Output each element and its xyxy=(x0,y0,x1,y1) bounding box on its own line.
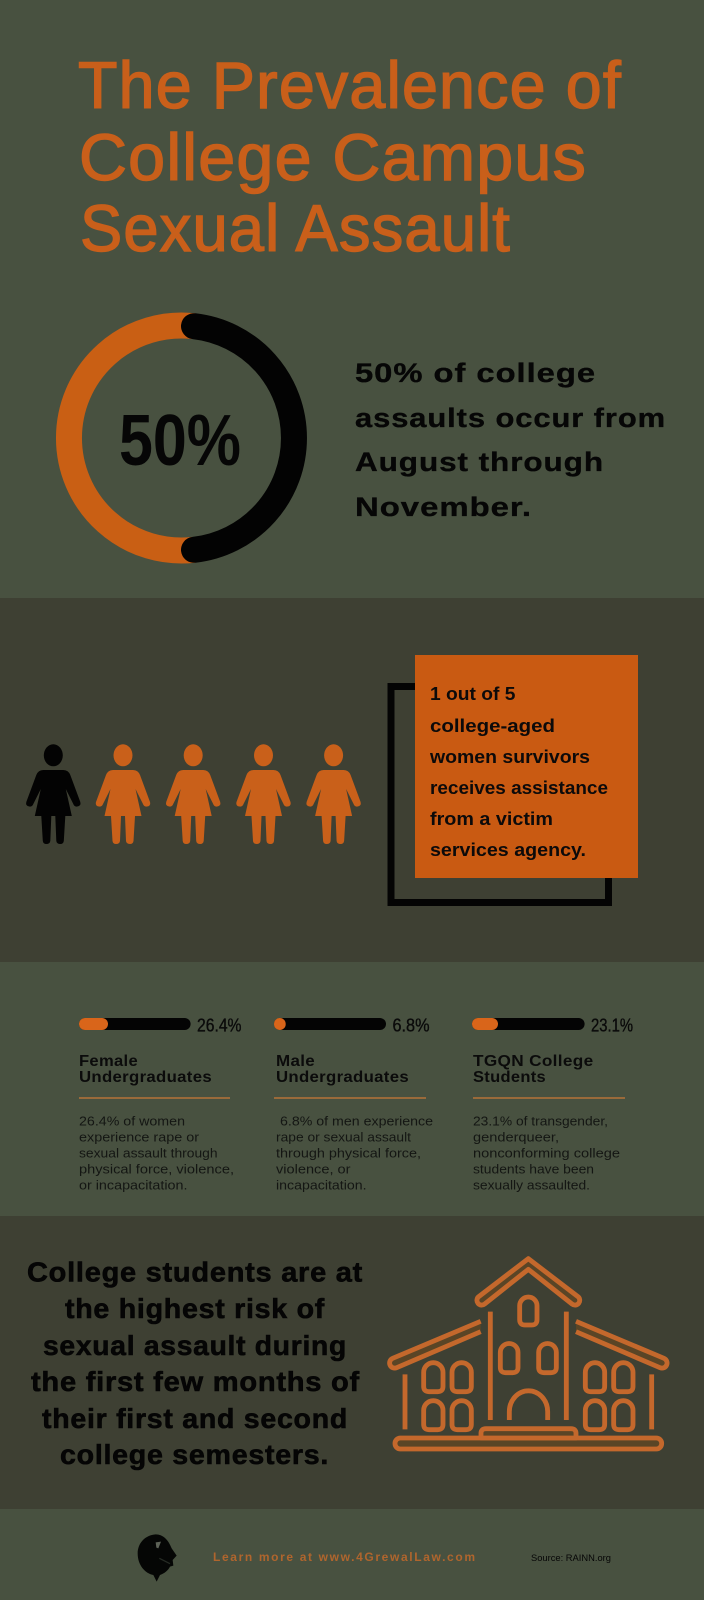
text: 50% of assaults occur August through November: assaults occur from xyxy=(355,403,666,433)
text: female statistic: sexual assault through xyxy=(79,1145,218,1160)
heading: female undergraduates xyxy=(79,1053,212,1086)
progress bar: 26.4%: 26.4% xyxy=(197,1016,242,1036)
callout: framed orange box xyxy=(391,655,638,902)
heading: male undergraduates xyxy=(276,1053,409,1086)
title: Sexual Assault xyxy=(80,191,511,265)
progress bar: 6.8% xyxy=(274,1016,430,1036)
icon: woman, orange 2 xyxy=(166,744,220,844)
text: male statistic xyxy=(276,1113,433,1192)
text: learn more link: Learn more at www.4GrewalLaw.com xyxy=(213,1550,475,1564)
title: College Campus xyxy=(79,120,587,194)
text: highest risk statement: their first and second xyxy=(42,1403,348,1434)
heading: female undergraduates: Undergraduates xyxy=(79,1069,212,1086)
text: 50% of assaults occur August through November: August through xyxy=(355,447,604,477)
text: TGQN statistic: nonconforming college xyxy=(473,1145,620,1160)
callout: framed orange box: receives assistance xyxy=(430,777,608,798)
heading: TGQN college students: Students xyxy=(473,1069,546,1086)
text: 50% of assaults occur August through November xyxy=(355,358,666,522)
progress bar: 26.4% xyxy=(79,1016,242,1036)
text: female statistic: or incapacitation. xyxy=(79,1177,188,1192)
icon: lion head logo xyxy=(138,1534,177,1582)
text: TGQN statistic: genderqueer, xyxy=(473,1129,559,1144)
callout: framed orange box: services agency. xyxy=(430,839,586,860)
text: 50% of assaults occur August through November: November. xyxy=(355,492,532,522)
column: female undergraduates xyxy=(79,1016,242,1192)
heading: TGQN college students xyxy=(473,1053,594,1086)
panel: 1 out of 5 xyxy=(0,598,704,962)
text: male statistic: violence, or xyxy=(276,1161,351,1176)
panel: highest risk statement xyxy=(0,1216,704,1509)
text: female statistic: physical force, violence, xyxy=(79,1161,234,1176)
heading: female undergraduates: Female xyxy=(79,1053,138,1070)
text: male statistic: incapacitation. xyxy=(276,1177,367,1192)
icon: college building xyxy=(390,1259,667,1449)
text: TGQN statistic xyxy=(473,1113,620,1192)
text: highest risk statement: the first few months of xyxy=(31,1366,360,1397)
callout: framed orange box: women survivors xyxy=(429,746,590,767)
icon row: five women figures xyxy=(26,744,361,844)
panel: header and 50 percent statistic xyxy=(0,0,704,598)
text: female statistic: experience rape or xyxy=(79,1129,200,1144)
text: 50% of assaults occur August through November: 50% of college xyxy=(355,358,596,388)
progress bar: 23.1%: 23.1% xyxy=(591,1016,633,1036)
text: female statistic: 26.4% of women xyxy=(79,1113,185,1128)
title xyxy=(78,48,622,265)
donut chart: 50%: 50% xyxy=(119,401,241,481)
text: male statistic: rape or sexual assault xyxy=(276,1129,411,1144)
progress bar: 6.8%: 6.8% xyxy=(392,1016,430,1036)
progress bar: 23.1% xyxy=(472,1016,633,1036)
column: male undergraduates xyxy=(274,1016,433,1192)
donut chart: 50% xyxy=(69,326,294,550)
text: highest risk statement: college semesters. xyxy=(60,1439,329,1470)
text: male statistic: through physical force, xyxy=(276,1145,421,1160)
heading: male undergraduates: Undergraduates xyxy=(276,1069,409,1086)
text: highest risk statement: the highest risk of xyxy=(65,1293,325,1324)
heading: TGQN college students: TGQN College xyxy=(473,1053,594,1070)
text: TGQN statistic: 23.1% of transgender, xyxy=(473,1113,608,1128)
title: The Prevalence of xyxy=(78,48,622,122)
icon: woman, orange 1 xyxy=(96,744,150,844)
text: highest risk statement: College students are at xyxy=(27,1256,363,1288)
heading: male undergraduates: Male xyxy=(276,1053,315,1070)
icon: woman, black xyxy=(26,744,80,844)
column: TGQN college students xyxy=(472,1016,633,1192)
panel: footer xyxy=(0,1509,704,1600)
icon: woman, orange 3 xyxy=(236,744,291,844)
callout: framed orange box: 1 out of 5 xyxy=(430,683,516,704)
text: female statistic xyxy=(79,1113,234,1192)
text: TGQN statistic: sexually assaulted. xyxy=(473,1177,590,1192)
text: highest risk statement: sexual assault during xyxy=(43,1330,347,1361)
text: TGQN statistic: students have been xyxy=(473,1161,594,1176)
icon: woman, orange 4 xyxy=(306,744,361,844)
text: male statistic: 6.8% of men experience xyxy=(280,1113,433,1128)
callout: framed orange box: college-aged xyxy=(430,715,555,736)
text: source: Source: RAINN.org xyxy=(531,1553,611,1564)
panel: three statistic columns xyxy=(0,962,704,1216)
callout: framed orange box: from a victim xyxy=(430,808,553,829)
text: highest risk statement xyxy=(27,1256,363,1470)
